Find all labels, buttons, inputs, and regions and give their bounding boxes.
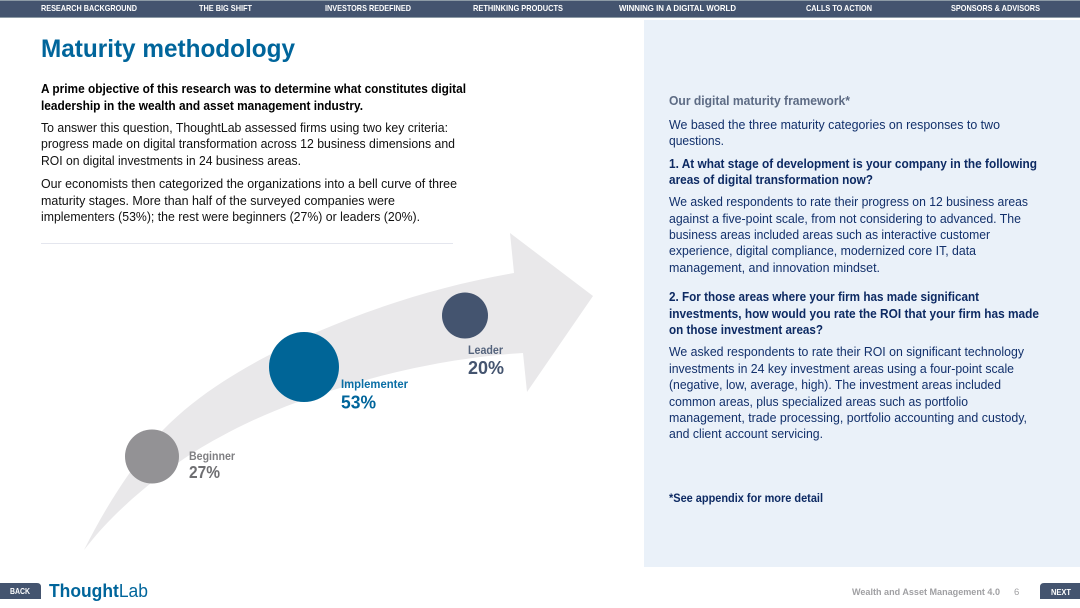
panel: digital maturity framework bbox=[644, 20, 1080, 567]
back button bbox=[0, 583, 41, 599]
navigation bar: WINNING IN A DIGITAL WORLD bbox=[619, 3, 736, 13]
next button bbox=[1040, 583, 1080, 599]
text block: maturity stages: maturity stages. More than half of the surveyed companies were bbox=[41, 194, 395, 208]
arrow: maturity progression bbox=[84, 233, 593, 550]
marker: beginner: 27% bbox=[189, 462, 220, 482]
text block: research objective: leadership in the wealth and asset management industry. bbox=[41, 99, 363, 113]
question 1 explanation: business areas included areas such as interactive customer bbox=[669, 228, 990, 242]
question 2: 2. For those areas where your firm has made significant bbox=[669, 290, 980, 304]
text block: assessment criteria: To answer this question, ThoughtLab assessed firms using two key criteria: bbox=[41, 121, 448, 135]
text block: assessment criteria: progress made on digital transformation across 12 business dimensions and bbox=[41, 137, 455, 151]
next button: NEXT bbox=[1051, 587, 1072, 597]
panel heading: Our digital maturity framework* bbox=[669, 94, 850, 108]
question 2 explanation: We asked respondents to rate their ROI on significant technology bbox=[669, 345, 1025, 359]
question 1 explanation: experience, digital compliance, modernized core IT, data bbox=[669, 244, 976, 258]
question 1: areas of digital transformation now? bbox=[669, 173, 873, 187]
question 2: on those investment areas? bbox=[669, 323, 823, 337]
marker: beginner bbox=[125, 430, 235, 484]
question 2 bbox=[669, 290, 1039, 337]
intro text: questions. bbox=[669, 134, 724, 148]
text block: assessment criteria bbox=[41, 121, 455, 168]
question 1 explanation bbox=[669, 195, 1028, 275]
logo: ThoughtLab: ThoughtLab bbox=[49, 580, 148, 601]
question 1 explanation: against a five-point scale, from not considering to advanced. The bbox=[669, 212, 1021, 226]
question 2 explanation: (negative, low, average, high). The investment areas included bbox=[669, 378, 1001, 392]
title: Maturity methodology bbox=[41, 35, 295, 63]
navigation bar: RETHINKING PRODUCTS bbox=[473, 3, 563, 13]
navigation bar bbox=[0, 0, 1080, 18]
text block: maturity stages bbox=[41, 177, 457, 224]
marker: implementer: Implementer bbox=[341, 379, 409, 391]
page number: 6 bbox=[1014, 587, 1019, 598]
question 1 explanation: management, and innovation mindset. bbox=[669, 261, 880, 275]
navigation bar: THE BIG SHIFT bbox=[199, 3, 253, 13]
question 1 bbox=[669, 157, 1037, 187]
navigation bar: CALLS TO ACTION bbox=[806, 3, 872, 13]
question 2 explanation: investments in 24 key investment areas using a four-point scale bbox=[669, 362, 1014, 376]
intro text: We based the three maturity categories on responses to two bbox=[669, 118, 1000, 132]
marker: leader: 20% bbox=[468, 358, 504, 378]
text block: research objective: A prime objective of this research was to determine what constitutes digital bbox=[41, 82, 466, 96]
question 2 explanation bbox=[669, 345, 1027, 441]
maturity curve diagram bbox=[84, 233, 593, 550]
text block: research objective bbox=[41, 82, 466, 113]
footer label: Wealth and Asset Management 4.0 bbox=[852, 587, 1000, 598]
text block: assessment criteria: ROI on digital investments in 24 business areas. bbox=[41, 154, 301, 168]
question 1: 1. At what stage of development is your company in the following bbox=[669, 157, 1037, 171]
navigation bar: INVESTORS REDEFINED bbox=[325, 3, 411, 13]
question 2 explanation: management, trade processing, portfolio accounting and custody, bbox=[669, 411, 1027, 425]
intro text bbox=[669, 118, 1000, 148]
marker: beginner: Beginner bbox=[189, 451, 235, 463]
navigation bar: RESEARCH BACKGROUND bbox=[41, 3, 137, 13]
footnote: *See appendix for more detail bbox=[669, 493, 823, 505]
question 2: investments, how would you rate the ROI that your firm has made bbox=[669, 307, 1039, 321]
text block: maturity stages: Our economists then categorized the organizations into a bell curve of three bbox=[41, 177, 457, 191]
navigation bar: SPONSORS & ADVISORS bbox=[951, 3, 1040, 13]
question 2 explanation: common areas, plus specialized areas such as portfolio bbox=[669, 395, 968, 409]
marker: leader bbox=[442, 292, 504, 378]
text block: maturity stages: implementers (53%); the rest were beginners (27%) or leaders (20%). bbox=[41, 210, 420, 224]
back button: BACK bbox=[10, 586, 31, 596]
marker: leader: Leader bbox=[468, 345, 503, 357]
question 1 explanation: We asked respondents to rate their progress on 12 business areas bbox=[669, 195, 1028, 209]
question 2 explanation: and client account servicing. bbox=[669, 427, 823, 441]
marker: implementer: 53% bbox=[341, 392, 376, 412]
marker: implementer bbox=[269, 332, 409, 412]
